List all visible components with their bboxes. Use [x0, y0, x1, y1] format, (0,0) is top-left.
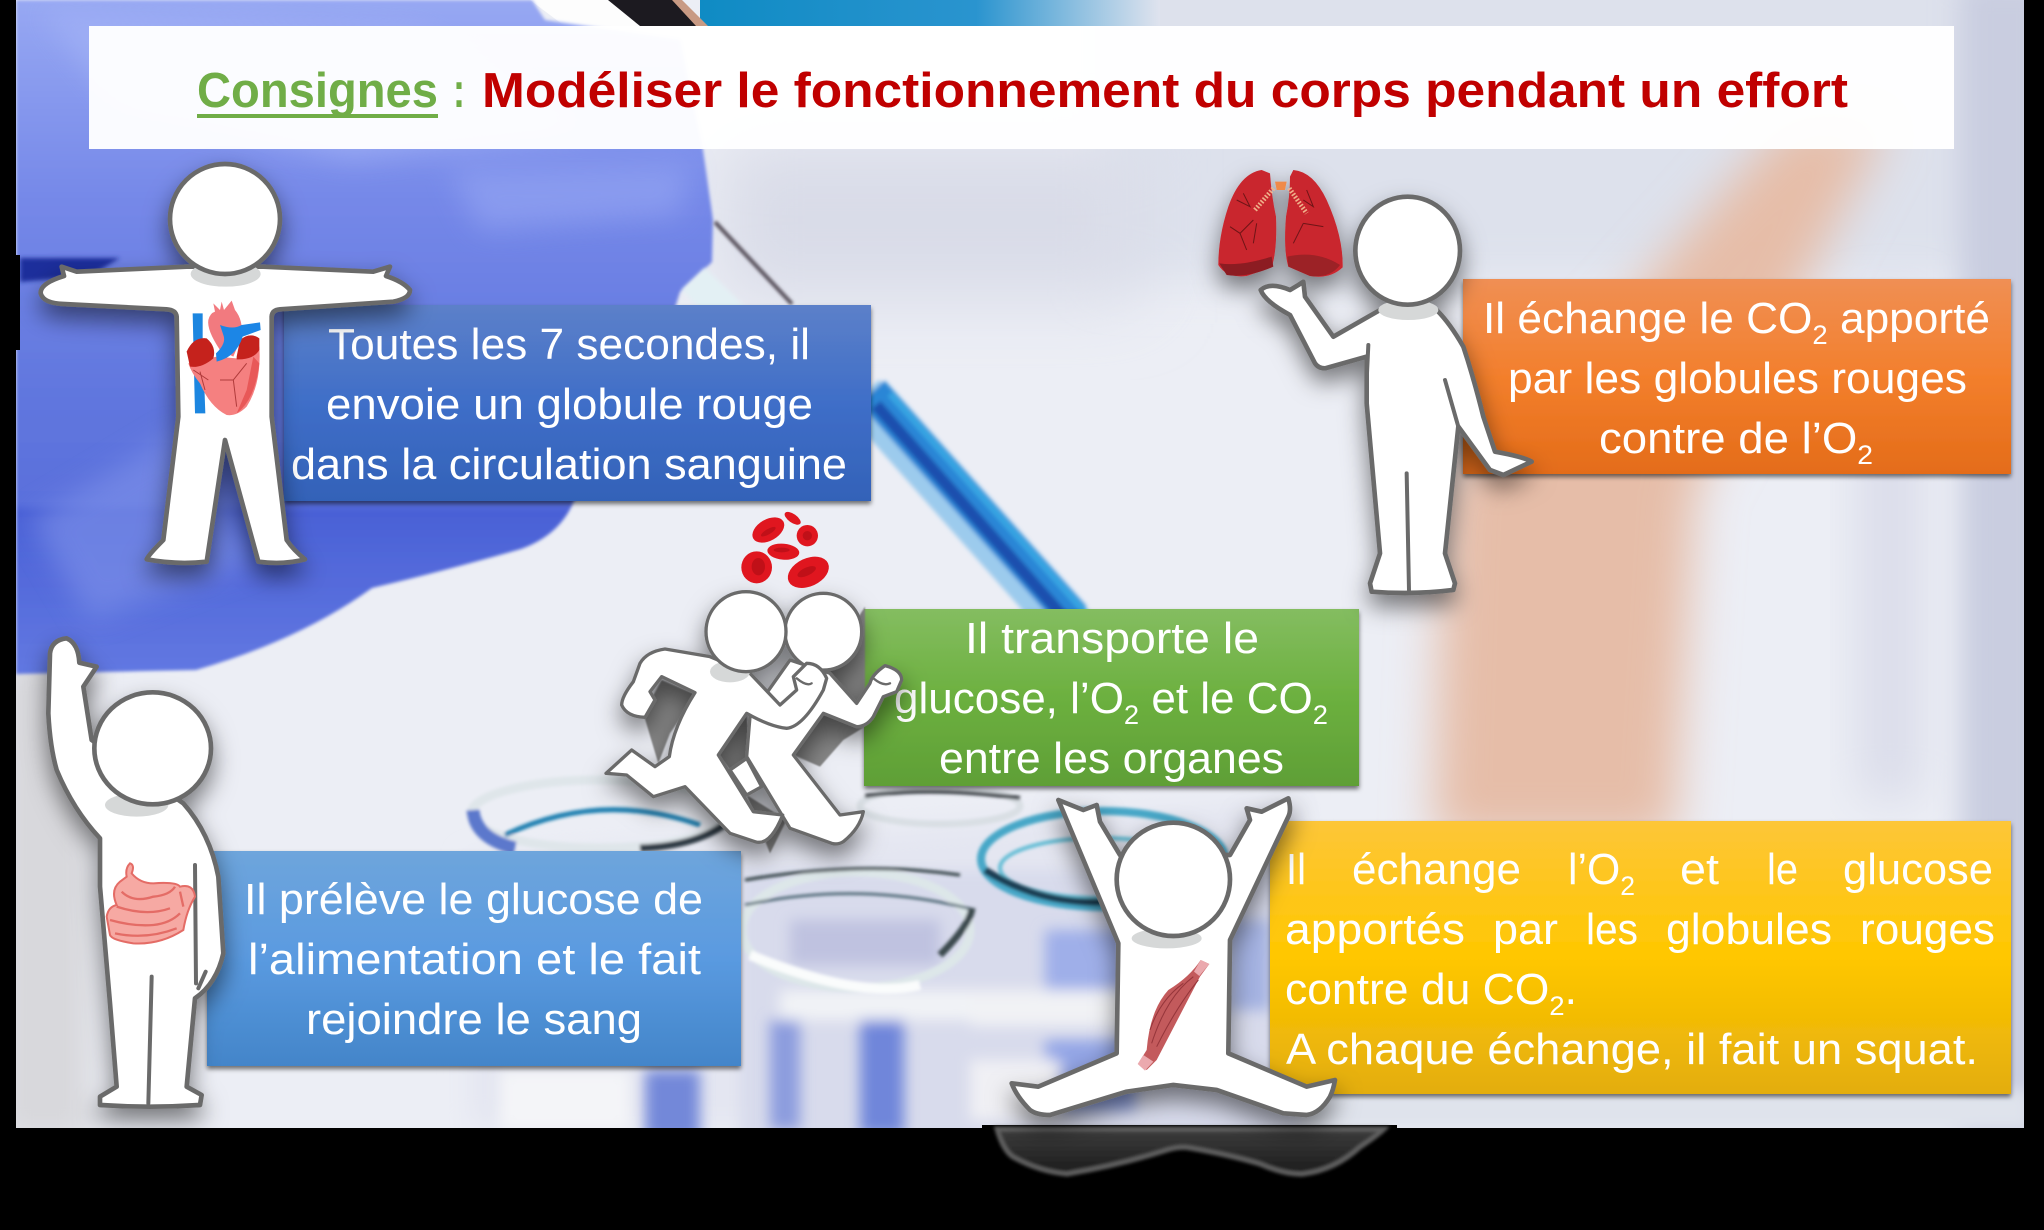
panel: muscle text: et [1680, 846, 1719, 894]
panel: muscle text [1270, 821, 2011, 1094]
panel: lungs text: 2 [1812, 320, 1828, 350]
panel: blood text [864, 609, 1359, 786]
icon: intestine [107, 863, 195, 943]
panel: lungs text: contre de l’O [1599, 415, 1846, 463]
panel: lungs text [1463, 279, 2011, 474]
figure: lungs person [1218, 170, 1532, 593]
panel: muscle text: l’O [1568, 846, 1621, 894]
panel: muscle text: globules [1666, 906, 1832, 954]
front runner [606, 592, 890, 842]
panel: intestine text [207, 851, 741, 1066]
figure: muscle person [1012, 798, 1335, 1115]
icon: lungs [1218, 170, 1343, 277]
panel: muscle text: glucose [1843, 846, 1993, 894]
icon: muscle [1138, 960, 1209, 1071]
panel: blood text: Il transporte le [965, 615, 1259, 663]
icon: red blood cells [741, 509, 834, 594]
panel: blood text: entre les organes [939, 735, 1284, 783]
panel: heart text: envoie un globule rouge [326, 381, 813, 429]
panel: muscle text: contre du CO [1285, 966, 1544, 1014]
panel: muscle text: le [1767, 846, 1798, 894]
runners body shading [643, 607, 865, 853]
panel: intestine text: l’alimentation et le fait [248, 936, 701, 984]
title banner: Modéliser le fonctionnement du corps pendant un effort [482, 64, 1848, 118]
title: Consignes: Consignes [197, 64, 438, 118]
panel: lungs text: par les globules rouges [1508, 355, 1967, 403]
panel: heart text: Toutes les 7 secondes, il [328, 321, 810, 369]
figure: intestine person [48, 638, 223, 1107]
panel: muscle text: apportés [1285, 906, 1465, 954]
test tubes [470, 780, 1300, 1140]
panel: intestine text: rejoindre le sang [306, 996, 642, 1044]
panel: muscle text: 2 [1549, 991, 1565, 1021]
black cut-off strip below the photo [982, 1125, 1397, 1230]
back runner [730, 593, 902, 844]
panel: muscle text: échange [1352, 846, 1521, 894]
panel: lungs text: 2 [1857, 440, 1873, 470]
panel: blood text: 2 [1313, 700, 1328, 730]
figure: heart person [41, 164, 410, 563]
panel: muscle text: rouges [1860, 906, 1995, 954]
title banner: : [453, 64, 465, 118]
panel: lungs text: apporté [1828, 295, 1990, 343]
figure: red blood cell runners [606, 509, 902, 853]
panel: intestine text: Il prélève le glucose de [244, 876, 703, 924]
icon: heart [187, 301, 261, 415]
panel: blood text: et le CO [1139, 675, 1313, 723]
title banner [89, 26, 1954, 149]
panel: heart text: dans la circulation sanguine [291, 441, 847, 489]
panel: blood text: 2 [1124, 700, 1139, 730]
panel: heart text [284, 305, 871, 501]
panel: muscle text: les [1586, 906, 1638, 954]
panel: muscle text: A chaque échange, il fait un squat. [1286, 1026, 1978, 1074]
panel: muscle text: . [1565, 966, 1577, 1014]
figure shadow below the picture [997, 1129, 1384, 1174]
panel: lungs text: Il échange le CO [1483, 295, 1807, 343]
panel: muscle text: par [1493, 906, 1558, 954]
panel: blood text: glucose, l’O [894, 675, 1121, 723]
panel: muscle text: 2 [1620, 871, 1635, 901]
panel: muscle text: Il [1286, 846, 1306, 894]
